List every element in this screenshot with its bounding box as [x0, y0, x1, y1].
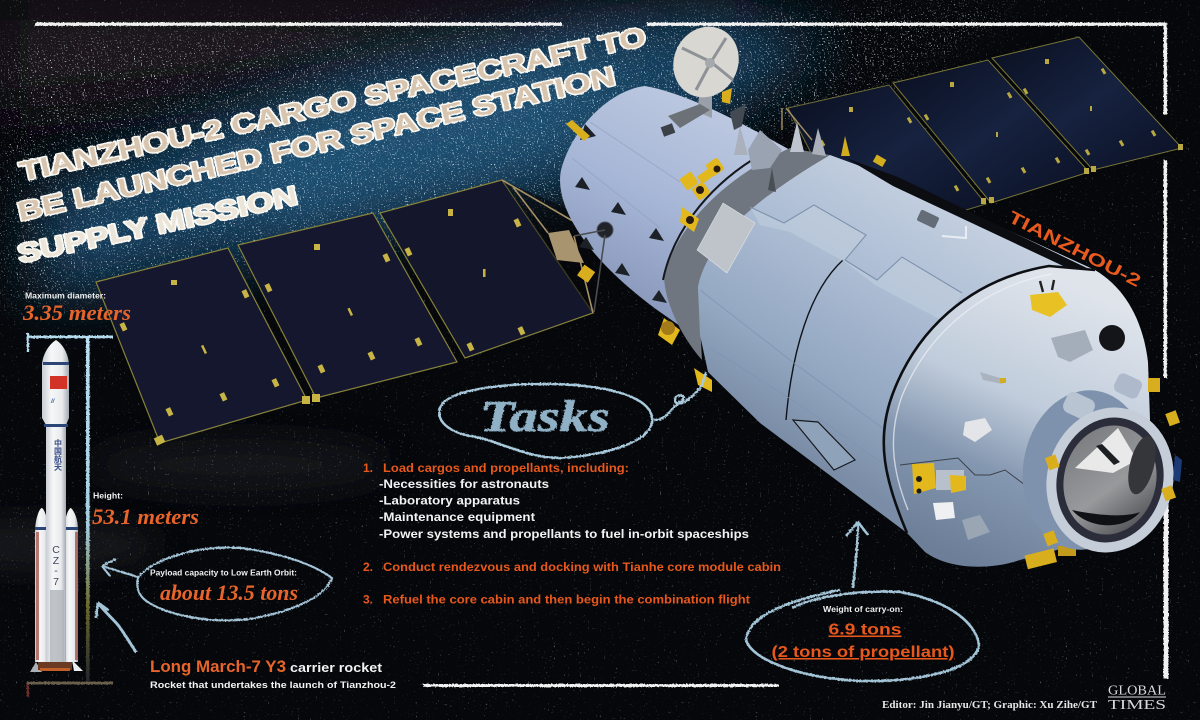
- credits: Editor: Jin Jianyu/GT; Graphic: Xu Zihe/GT: [882, 700, 1097, 711]
- spacecraft name label: TIANZHOU-2: [1005, 207, 1145, 291]
- vertical label: 中: [54, 438, 62, 448]
- yellow thruster cluster: [658, 157, 725, 392]
- rocket fairing: [42, 340, 69, 425]
- task 3: Refuel the core cabin and then begin the combination flight: [383, 592, 750, 606]
- solar array: right wing: [782, 37, 1183, 230]
- task 1: Load cargos and propellants, including:: [383, 461, 629, 475]
- title: TIANZHOU-2 CARGO SPACECRAFT TO: [17, 21, 649, 187]
- CZ-7 mark: Z: [53, 555, 60, 567]
- dish antenna: [661, 16, 750, 137]
- Global Times logo: TIMES: [1108, 697, 1166, 712]
- label: height: Height:: [93, 492, 123, 500]
- rocket name: carrier rocket: [290, 661, 383, 675]
- label: height: 53.1 meters: [92, 504, 199, 529]
- task 1: -Power systems and propellants to fuel in-orbit spaceships: [379, 527, 749, 541]
- dimension lines: [26, 333, 113, 697]
- weight text: Weight of carry-on:: [823, 604, 903, 614]
- rocket: //: [50, 399, 56, 405]
- vertical label: 国: [54, 447, 62, 456]
- title: [15, 21, 649, 269]
- task 1: [363, 461, 749, 541]
- CZ-7 mark: C: [52, 544, 60, 556]
- task 3: 3.: [363, 592, 373, 606]
- front dome: [884, 266, 1150, 569]
- rocket: [30, 340, 83, 672]
- rear service module: [560, 86, 790, 340]
- label: height: [92, 492, 199, 529]
- tasks bubble with leader: [439, 372, 706, 458]
- main cargo cylinder: [697, 155, 1118, 533]
- weight text: 6.9 tons: [828, 622, 902, 638]
- engines: [30, 660, 83, 672]
- task 2: Conduct rendezvous and docking with Tianhe core module cabin: [383, 560, 781, 574]
- CZ-7 mark: -: [54, 565, 58, 577]
- vertical label: 天: [54, 463, 62, 472]
- rocket boosters: [35, 508, 78, 662]
- payload text: Payload capacity to Low Earth Orbit:: [150, 568, 297, 578]
- CZ-7 mark: 7: [53, 576, 59, 588]
- flag: [50, 376, 67, 389]
- rocket name: [150, 658, 396, 691]
- label: maximum diameter: 3.35 meters: [22, 300, 131, 325]
- Global Times logo: [1108, 682, 1166, 712]
- payload callout bubble and arrows: [96, 548, 332, 652]
- payload text: [150, 568, 298, 605]
- spacecraft: [560, 16, 1189, 569]
- weight callout bubble and arrow: [746, 522, 979, 681]
- docking port: [1012, 371, 1189, 566]
- task 2: 2.: [363, 560, 373, 574]
- transition ring with thrusters: [663, 122, 886, 360]
- solar array: left wing: [96, 180, 620, 446]
- weight text: [772, 604, 954, 661]
- task 1: -Necessities for astronauts: [379, 477, 549, 491]
- task 1: -Laboratory apparatus: [379, 494, 520, 508]
- Global Times logo: GLOBAL: [1108, 682, 1166, 698]
- payload text: about 13.5 tons: [160, 580, 298, 605]
- title: SUPPLY MISSION: [15, 180, 300, 269]
- label: maximum diameter: Maximum diameter:: [25, 292, 106, 300]
- vertical label: 航: [54, 454, 62, 464]
- weight text: (2 tons of propellant): [772, 644, 954, 661]
- tasks bubble with leader: Tasks: [480, 392, 610, 441]
- rocket name: Long March-7 Y3: [150, 658, 286, 676]
- tasks list: [363, 461, 781, 606]
- task 1: -Maintenance equipment: [379, 510, 535, 524]
- task 1: 1.: [363, 461, 373, 475]
- rocket core: [46, 423, 66, 662]
- title: BE LAUNCHED FOR SPACE STATION: [15, 61, 618, 227]
- rocket name: Rocket that undertakes the launch of Tianzhou-2: [150, 680, 396, 691]
- circular thruster ports: [661, 166, 720, 335]
